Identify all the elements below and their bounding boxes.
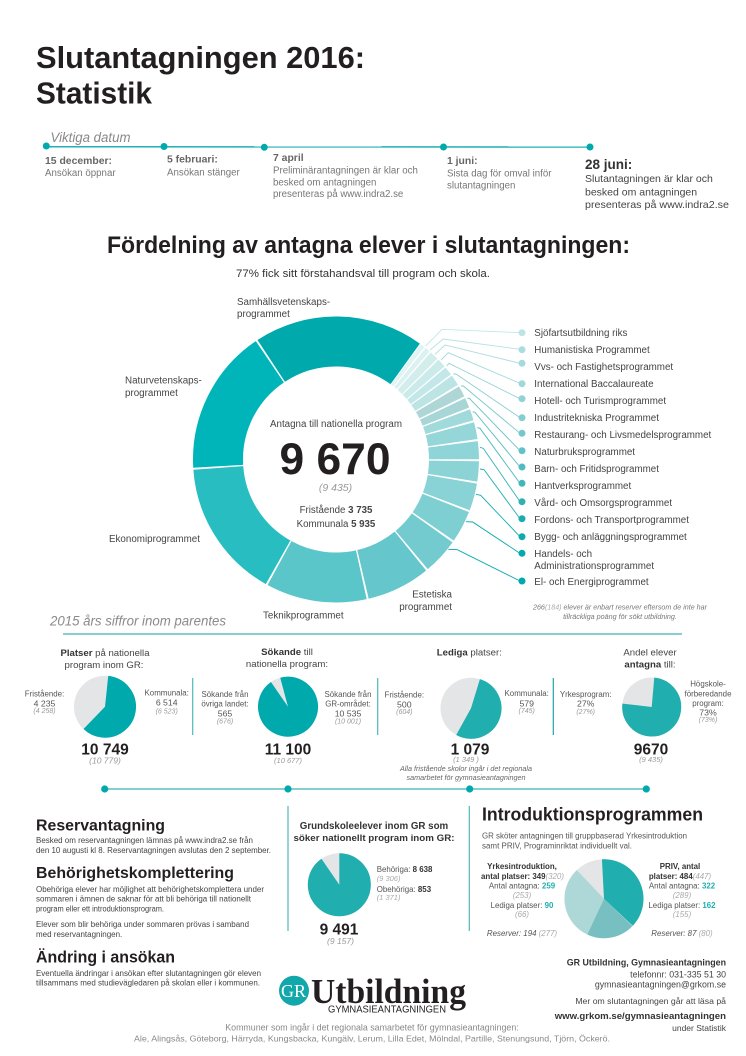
legend: smaller programmes: Vård- och Omsorgsprogrammet — [534, 498, 672, 509]
intro heading: Introduktionsprogrammen — [482, 804, 703, 824]
applicants labels: Sökande från — [325, 690, 371, 699]
donut labels: Teknikprogrammet — [263, 610, 344, 622]
applicants heading: Sökande till — [261, 647, 313, 658]
date: 28 juni — [585, 157, 729, 211]
title: Slutantagningen 2016: — [36, 41, 365, 75]
applicants labels: (10 001) — [335, 718, 361, 726]
places labels: 4 235 — [34, 698, 56, 708]
intro description: GR sköter antagningen till gruppbaserad Yrkesintroduktion — [482, 832, 687, 840]
leader lines from donut to legend — [426, 329, 520, 581]
legend: smaller programmes: Handels- och — [534, 549, 592, 560]
applicants labels: 565 — [218, 708, 232, 718]
donut labels: Naturvetenskaps- — [125, 376, 202, 386]
panel: places — [25, 648, 189, 766]
contact details: www.grkom.se/gymnasieantagningen — [554, 1011, 726, 1022]
panel: vacant places — [385, 648, 549, 782]
legend: smaller programmes: Naturbruksprogrammet — [534, 447, 635, 458]
legend: smaller programmes: Vvs- och Fastighetsprogrammet — [534, 362, 673, 373]
share heading: antagna till: — [624, 660, 676, 670]
places labels: Fristående: — [25, 690, 64, 698]
applicants labels — [201, 690, 371, 726]
contact details: under Statistik — [672, 1023, 727, 1033]
logo: GR Utbildning — [279, 972, 466, 1016]
share labels: Högskole- — [690, 680, 726, 688]
share labels: 27% — [577, 698, 595, 708]
PRIV figures: (155) — [673, 910, 692, 919]
share labels — [560, 680, 732, 724]
donut centre summary: Antagna till nationella program — [270, 419, 402, 430]
legend: smaller programmes: Restaurang- och Livsmedelsprogrammet — [534, 430, 712, 441]
legend: smaller programmes: Humanistiska Programmet — [534, 345, 650, 356]
vacant pie chart — [440, 678, 502, 739]
main heading: Fördelning av antagna elever i slutantagningen: — [107, 232, 630, 259]
applicants labels: (676) — [217, 718, 233, 726]
grundskola total — [320, 922, 359, 946]
date: 1 juni: Sista dag för omval inför — [447, 168, 552, 180]
contact details: GR Utbildning, Gymnasieantagningen — [567, 958, 726, 968]
panel: reserve admission: Reservantagning — [36, 818, 165, 834]
places labels: 6 514 — [156, 698, 178, 708]
PRIV figures: platser: 484(447) — [649, 872, 712, 881]
panel: application changes — [36, 948, 261, 988]
places heading — [60, 648, 150, 671]
grundskola labels: (1 371) — [377, 893, 401, 902]
places labels: (4 258) — [33, 708, 56, 715]
donut centre summary: Kommunala 5 935 — [297, 519, 376, 530]
grundskola heading — [294, 821, 454, 844]
panel: eligibility completion: Elever som blir behöriga under sommaren prövas i samband — [36, 920, 249, 929]
donut labels: Estetiska — [412, 590, 453, 600]
share heading: Andel elever — [623, 648, 677, 658]
date: 5 februari — [167, 154, 240, 178]
donut labels: programmet — [125, 388, 178, 399]
contact details: gymnasieantagningen@grkom.se — [595, 980, 726, 990]
donut labels: Ekonomiprogrammet — [109, 534, 200, 545]
footer: municipalities: Kommuner som ingår i det regionala samarbetet för gymnasieantagningen: — [225, 1022, 519, 1032]
places heading: Platser på nationella — [60, 648, 150, 659]
date: 15 december: Ansökan öppnar — [45, 168, 116, 179]
legend: smaller programmes: Administrationsprogrammet — [534, 561, 654, 572]
logo wordmark: Utbildning — [311, 972, 466, 1011]
vacant labels: Fristående: — [385, 690, 424, 700]
panel: eligibility completion: program eller ett introduktionsprogram. — [36, 904, 164, 914]
logo subtitle: GYMNASIEANTAGNINGEN — [328, 1005, 446, 1016]
panel: reserve admission: den 10 augusti kl 8. Reservantagningen avslutas den 2 september. — [36, 846, 271, 855]
share labels: 73% — [699, 708, 717, 718]
applicants heading: nationella program: — [246, 659, 328, 670]
logo badge: GR — [281, 981, 306, 1001]
intro pie chart — [564, 859, 644, 938]
grundskola labels: Obehöriga: 853 — [377, 885, 432, 894]
share labels: Yrkesprogram: — [560, 690, 612, 699]
panel: application changes: Ändring i ansökan — [36, 948, 175, 966]
PRIV figures: Lediga platser: 162 — [648, 901, 716, 910]
grundskola labels: (9 306) — [377, 874, 401, 883]
donut labels — [109, 297, 453, 622]
PRIV figures: Antal antagna: 322 — [649, 882, 716, 890]
PRIV figures: (289) — [673, 891, 692, 900]
reserves note: tillräckliga poäng för sökt utbildning. — [563, 612, 677, 621]
grundskola labels: Behöriga: 8 638 — [377, 865, 433, 874]
date: 5 februari: Ansökan stänger — [167, 168, 240, 178]
date: 7 april: 7 april — [273, 153, 304, 164]
applicants labels: Sökande från — [202, 690, 248, 699]
panel: eligibility completion — [36, 865, 264, 939]
intro description — [482, 832, 687, 850]
donut centre summary — [270, 419, 402, 530]
places total: (10 779) — [89, 756, 121, 766]
timeline: important dates — [43, 130, 729, 211]
grundskola pie chart — [308, 853, 371, 916]
places total: 10 749 — [81, 742, 129, 758]
donut labels: Samhällsvetenskaps- — [237, 297, 330, 308]
donut labels: programmet — [237, 309, 290, 320]
Yrkesintroduktion figures: Antal antagna: 259 — [489, 882, 556, 890]
panel: grundskola applicants — [294, 821, 454, 946]
grundskola total: (9 157) — [327, 936, 354, 946]
places labels: (6 523) — [156, 708, 178, 716]
panel: applicants — [201, 647, 371, 765]
date: 1 juni — [447, 156, 552, 192]
date: 28 juni: besked om antagningen — [585, 186, 697, 198]
date: 15 december — [45, 156, 116, 179]
footer: municipalities — [134, 1022, 610, 1044]
legend: smaller programmes: El- och Energiprogrammet — [534, 577, 649, 588]
date: 15 december: 15 december: — [45, 156, 112, 167]
applicants total: (10 677) — [274, 756, 302, 765]
panel: eligibility completion: Behörighetskomplettering — [36, 865, 234, 882]
date: 1 juni: slutantagningen — [447, 180, 515, 192]
date: 7 april: besked om antagningen — [273, 178, 376, 188]
Yrkesintroduktion figures — [481, 862, 564, 938]
grundskola heading: Grundskoleelever inom GR som — [300, 821, 449, 832]
contact details: Mer om slutantagningen går att läsa på — [575, 996, 726, 1006]
places heading: program inom GR: — [65, 660, 143, 671]
date: 1 juni: 1 juni: — [447, 156, 478, 167]
vacant labels: 500 — [397, 700, 412, 710]
donut centre summary: (9 435) — [319, 482, 352, 494]
contact details: telefonnr: 031-335 51 30 — [630, 970, 726, 980]
share labels: (73%) — [699, 717, 717, 724]
vacant labels — [385, 689, 549, 716]
date: 7 april: presenteras på www.indra2.se — [273, 189, 403, 200]
date: 28 juni: presenteras på www.indra2.se — [585, 199, 729, 211]
vacant labels: 579 — [519, 698, 534, 708]
Yrkesintroduktion figures: Lediga platser: 90 — [491, 901, 554, 910]
applicants total: 11 100 — [265, 742, 311, 758]
date: 28 juni: Slutantagningen är klar och — [585, 173, 713, 185]
vacant labels: (745) — [519, 708, 535, 715]
date: 7 april: Preliminärantagningen är klar och — [273, 166, 418, 176]
vacant note: Alla fristående skolor ingår i det regionala — [399, 765, 532, 773]
share total: (9 435) — [639, 755, 663, 764]
share labels: (27%) — [576, 709, 595, 716]
donut centre summary: 9 670 — [280, 435, 390, 484]
donut labels: programmet — [399, 602, 452, 613]
applicants labels: 10 535 — [335, 708, 361, 718]
Yrkesintroduktion figures: (253) — [513, 891, 532, 900]
donut chart: admitted students by programme — [169, 293, 503, 626]
legend: smaller programmes: Barn- och Fritidsprogrammet — [534, 464, 659, 475]
donut centre summary: Fristående 3 735 — [300, 505, 373, 516]
date: 7 april — [273, 153, 418, 200]
title: Statistik — [36, 76, 152, 110]
Yrkesintroduktion figures: (66) — [515, 910, 529, 919]
share heading — [623, 648, 677, 670]
applicants labels: övriga landet: — [201, 700, 249, 709]
applicants labels: GR-området: — [325, 700, 371, 709]
legend: smaller programmes: International Baccalaureate — [534, 379, 654, 390]
panel: reserve admission: Besked om reservantagningen lämnas på www.indra2.se från — [36, 836, 253, 845]
logo badge — [279, 976, 309, 1006]
legend: smaller programmes: Bygg- och anläggningsprogrammet — [534, 532, 687, 543]
applicants pie chart — [258, 677, 318, 737]
vacant note: samarbetet för gymnasieantagningen — [406, 775, 526, 782]
share labels: förberedande — [685, 690, 732, 698]
subheading: 77% fick sitt förstahandsval till program och skola. — [236, 268, 490, 280]
section note: 2015 figures: 2015 års siffror inom parentes — [49, 612, 226, 628]
Yrkesintroduktion figures: Reserver: 194 (277) — [487, 929, 557, 938]
connector line with markers — [101, 785, 650, 793]
vacant labels: (604) — [396, 709, 412, 716]
title — [36, 41, 365, 110]
legend: smaller programmes: Sjöfartsutbildning riks — [534, 328, 628, 339]
vacant note — [399, 765, 532, 782]
date: 5 februari: 5 februari: — [167, 154, 218, 166]
legend: smaller programmes — [518, 328, 712, 588]
share labels: program: — [692, 699, 724, 708]
PRIV figures — [648, 862, 716, 938]
intro description: samt PRIV, Programinriktat individuellt val. — [482, 842, 632, 850]
panel: share admitted — [560, 648, 732, 764]
panel: application changes: Eventuella ändringar i ansökan efter slutantagningen gör eleven — [36, 969, 261, 978]
divider line — [63, 633, 682, 635]
grundskola total: 9 491 — [320, 922, 359, 938]
panel: application changes: tillsammans med studievägledaren på skolan eller i kommunen. — [36, 978, 260, 988]
vacant heading: Lediga platser: — [437, 648, 502, 658]
share pie chart — [622, 678, 681, 736]
panel: eligibility completion: Obehöriga elever har möjlighet att behörighetskomplettera under — [36, 885, 264, 894]
date: 28 juni: 28 juni: — [585, 157, 632, 172]
places pie chart — [74, 676, 136, 738]
vacant total: 1 079 — [451, 742, 490, 758]
applicants heading — [246, 647, 328, 670]
PRIV figures: Reserver: 87 (80) — [651, 929, 713, 938]
legend: smaller programmes: Industritekniska Programmet — [534, 413, 659, 424]
timeline heading: Viktiga datum — [50, 130, 130, 145]
PRIV figures: PRIV, antal — [660, 862, 700, 871]
grundskola heading: söker nationellt program inom GR: — [294, 833, 454, 844]
panel: eligibility completion: med reservantagningen. — [36, 930, 122, 939]
Yrkesintroduktion figures: Yrkesintroduktion, — [487, 862, 557, 871]
panel: introductory programmes — [481, 804, 716, 938]
reserves note: 266(184) elever är enbart reserver eftersom de inte har — [532, 604, 708, 612]
panel: eligibility completion: sommaren i ämnen de saknar för att bli behöriga till nationellt — [36, 894, 252, 904]
legend: smaller programmes: Fordons- och Transportprogrammet — [534, 515, 689, 526]
Yrkesintroduktion figures: antal platser: 349(320) — [481, 872, 564, 881]
legend: smaller programmes: Hantverksprogrammet — [534, 481, 631, 492]
places labels — [25, 688, 189, 716]
vacant labels: Kommunala: — [505, 689, 549, 698]
panel: reserve admission — [36, 818, 271, 855]
contact details — [554, 958, 727, 1033]
footer: municipalities: Ale, Alingsås, Göteborg, Härryda, Kungsbacka, Kungälv, Lerum, Lilla Edet, Mölndal, Partille, Stenungsund, Tjörn, Öckerö. — [134, 1034, 610, 1044]
timeline line with date markers — [43, 142, 594, 151]
places labels: Kommunala: — [145, 688, 189, 698]
share total: 9670 — [634, 742, 668, 758]
legend: smaller programmes: Hotell- och Turismprogrammet — [534, 396, 666, 407]
vacant total: (1 349 ) — [453, 755, 479, 764]
reserves note — [532, 604, 708, 621]
grundskola labels — [377, 865, 433, 902]
